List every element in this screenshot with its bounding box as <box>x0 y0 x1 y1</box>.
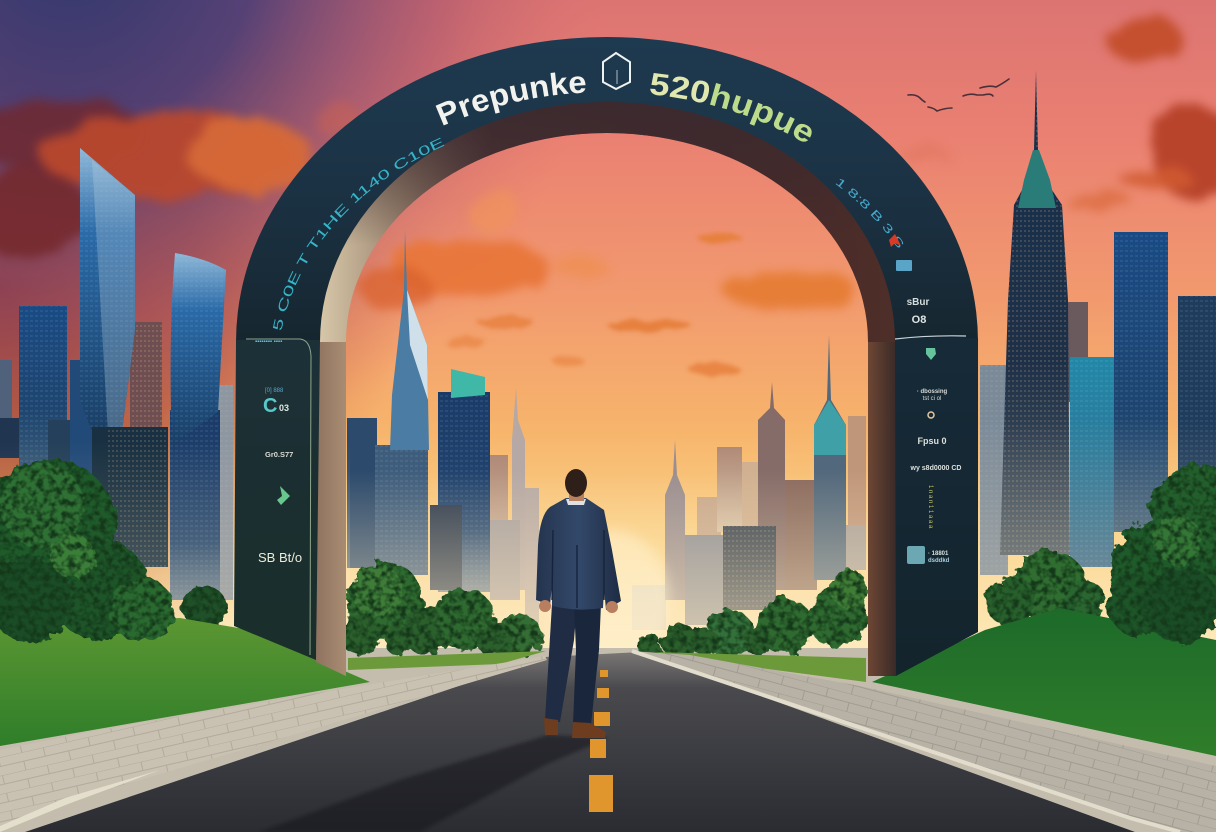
pillar vertical yellow text: 1 n a n 1 1 a a a <box>927 485 933 529</box>
road centre markings <box>589 670 613 812</box>
arch small text left: 5 C0E T T1HE 1140 C10E <box>272 138 444 330</box>
right arch number: O8 <box>912 314 926 326</box>
arch small text right: 1 8:8 B 3 S <box>836 179 904 248</box>
right stone kerb <box>632 651 1216 832</box>
icon: blue card <box>896 260 912 271</box>
city skyline: far left <box>0 306 162 510</box>
right leg <box>573 604 601 725</box>
pillar label: second: tst ci ol <box>923 396 941 402</box>
pillar label: middle: Gr0.S77 <box>265 450 293 459</box>
arch front band <box>236 37 978 342</box>
left grass hill <box>0 618 370 746</box>
tree left <box>0 459 174 642</box>
trees behind grass <box>183 550 1105 660</box>
icon: small orange ring <box>928 412 934 418</box>
city skyline: centre right <box>632 335 866 630</box>
shoes <box>544 718 606 738</box>
pillar label: top: · dbossing <box>917 389 947 395</box>
arch underside <box>319 101 896 342</box>
arm shading <box>552 530 604 608</box>
icon: hexagon <box>603 53 630 89</box>
pillar trim lines <box>246 336 966 655</box>
pillar icon: C: C <box>263 395 277 417</box>
pillar label: top: [0] 888 <box>265 388 284 394</box>
paved ground base <box>0 648 1216 832</box>
left leg <box>545 604 577 722</box>
pillar icon: green arrow <box>277 486 290 505</box>
left pillar content <box>255 339 302 565</box>
dark office building left <box>92 253 233 600</box>
right pillar front <box>895 338 978 676</box>
arch <box>234 37 978 676</box>
right grass hill <box>872 608 1216 756</box>
right arch label: sBur <box>907 297 929 308</box>
glass tower left <box>80 148 135 432</box>
clouds <box>0 18 1216 375</box>
birds <box>908 79 1009 111</box>
pillar label: bar: wy s8d0000 CD <box>910 465 961 472</box>
right pillar content <box>907 348 961 564</box>
pillar label: 03: 03 <box>279 403 289 413</box>
pillar label: middle: Fpsu 0 <box>917 436 947 446</box>
atmospheric haze <box>0 420 1216 670</box>
arch heading right: 520 hupue: 520hupue <box>650 73 812 142</box>
arch left pillar side <box>316 340 346 676</box>
pillar label: bottom 2: dsddkd <box>928 558 950 564</box>
jacket <box>536 498 621 610</box>
city skyline: centre left <box>347 230 539 623</box>
road <box>25 652 1135 832</box>
icon: picture tile <box>907 546 925 564</box>
red arrow mark <box>889 234 901 247</box>
tree right <box>1108 464 1216 643</box>
man from behind <box>536 469 621 738</box>
city skyline: far right <box>980 70 1216 575</box>
arch heading left: Prepunke: Prepunke <box>436 72 586 126</box>
left stone kerb <box>0 656 547 832</box>
arch right pillar side <box>868 340 896 676</box>
neck and head <box>565 469 587 501</box>
pillar header text: ▪▪▪▪▪▪▪▪ ▪▪▪▪ <box>255 339 282 345</box>
pillar label: bottom: · 18801 <box>928 551 949 557</box>
left pillar front <box>234 340 320 660</box>
hands <box>539 600 618 613</box>
man's shadow on road <box>260 735 608 832</box>
grass strips by road <box>348 651 866 682</box>
collar <box>566 499 586 505</box>
pillar label: percent: SB Bt/o <box>258 550 302 565</box>
icon: green gem <box>926 348 936 360</box>
